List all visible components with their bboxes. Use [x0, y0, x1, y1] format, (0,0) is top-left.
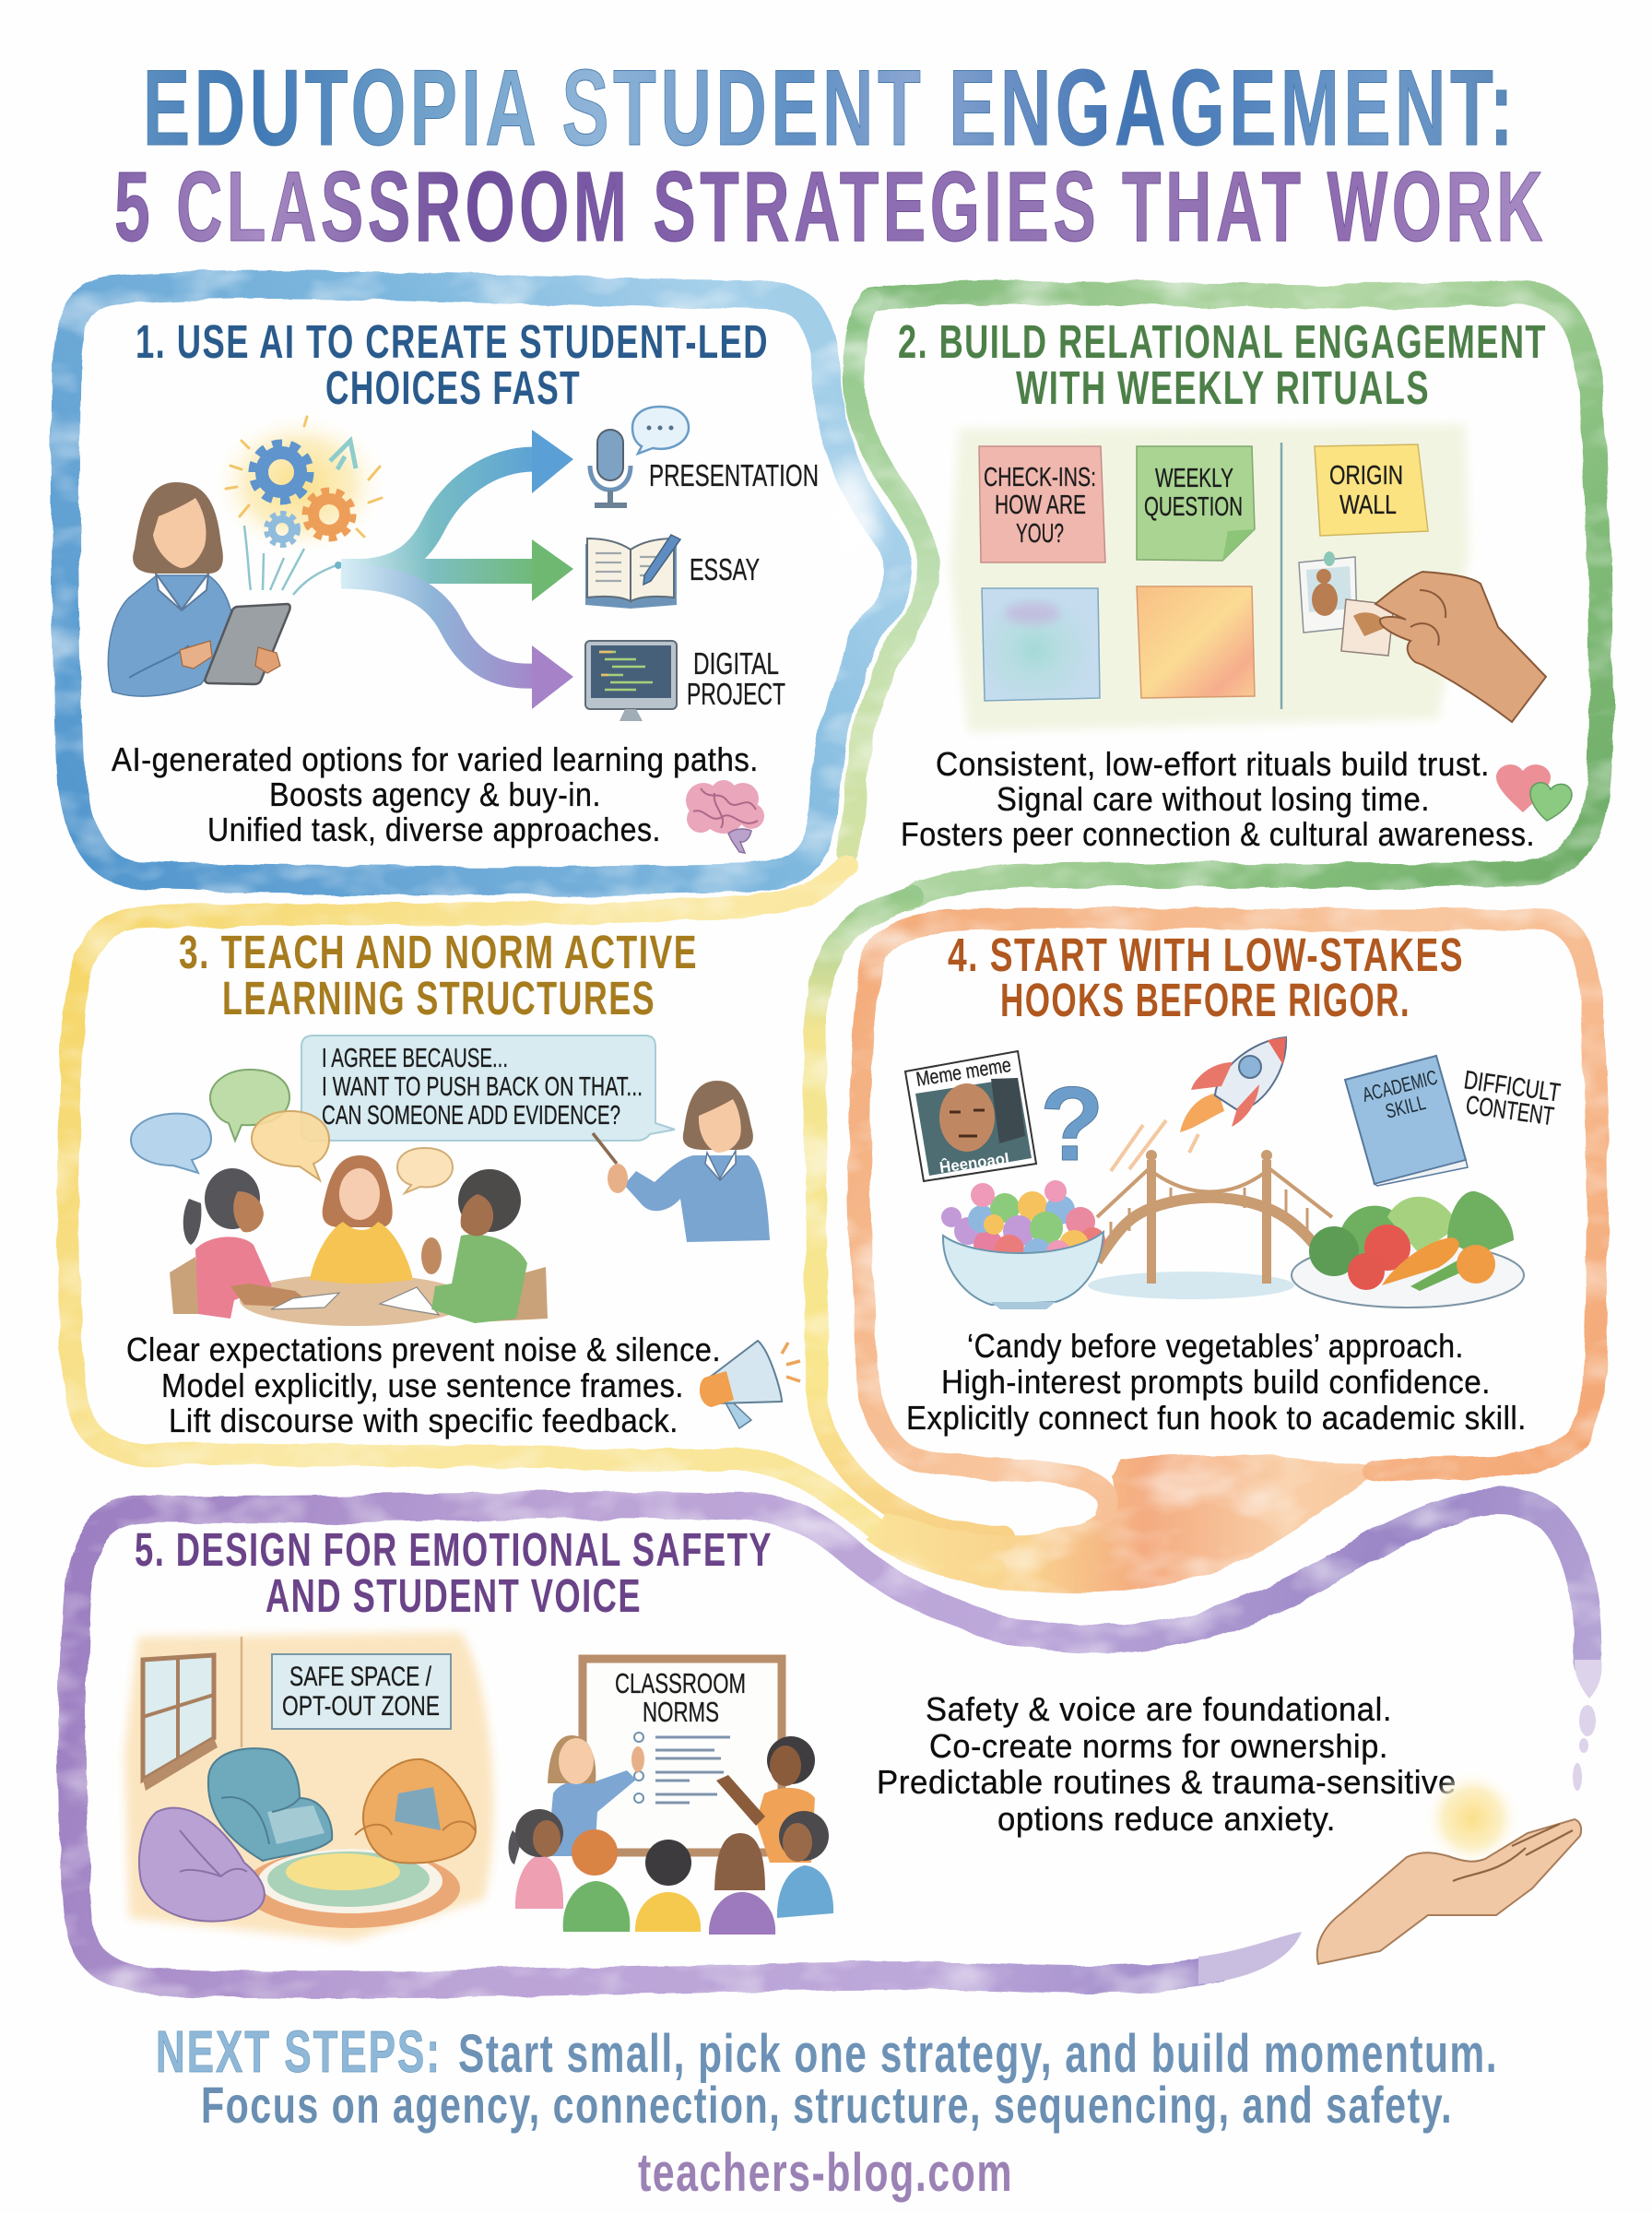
heading 3: 3. TEACH AND NORM ACTIVE — [179, 926, 698, 978]
sign: safe space: SAFE SPACE / — [289, 1662, 431, 1692]
illustration: students at table — [170, 1155, 548, 1326]
blue armchair — [208, 1748, 332, 1861]
note: weekly question: QUESTION — [1144, 492, 1243, 522]
arrow: to essay — [341, 539, 573, 601]
note: check-ins: CHECK-INS: — [984, 463, 1096, 492]
illustration: meme card — [905, 1051, 1036, 1181]
frame: purple — [72, 1502, 1587, 1984]
icon: monitor with code — [585, 641, 677, 721]
illustration: blue book: SKILL — [1383, 1091, 1428, 1123]
body text 5 — [877, 1690, 1457, 1838]
student presenter — [716, 1736, 815, 1863]
illustration: sticky note wall — [950, 424, 1546, 732]
heading 3: LEARNING STRUCTURES — [222, 972, 655, 1024]
heading 5: 5. DESIGN FOR EMOTIONAL SAFETY — [135, 1523, 773, 1576]
illustration: vegetable plate — [1292, 1191, 1524, 1308]
purple beanbag — [139, 1808, 265, 1922]
sweater — [108, 575, 233, 696]
tapered end of frame — [1198, 1932, 1302, 1984]
note: weekly question: WEEKLY — [1155, 464, 1233, 493]
icon: hand placing photo — [1375, 572, 1546, 722]
icon: open book and pen — [585, 535, 680, 609]
arrow: to digital project — [341, 576, 573, 709]
heading 4 — [948, 929, 1464, 1026]
illustration: speech bubbles: I WANT TO PUSH BACK ON THAT... — [322, 1072, 643, 1102]
body text 4 — [906, 1327, 1527, 1437]
body text 5: Predictable routines & trauma-sensitive — [877, 1763, 1457, 1801]
note: origin wall — [1315, 444, 1428, 536]
body text 4: ‘Candy before vegetables’ approach. — [967, 1327, 1464, 1365]
frame: green — [848, 292, 1601, 899]
icon: megaphone — [700, 1341, 800, 1428]
label: difficult content — [1462, 1065, 1562, 1130]
note: origin wall: ORIGIN — [1329, 461, 1403, 491]
illustration: blue book — [1345, 1056, 1468, 1186]
purple drips — [1573, 1660, 1601, 1791]
panel 4: low-stakes hooks — [859, 918, 1598, 1512]
body text 2 — [901, 745, 1535, 853]
window — [143, 1655, 218, 1791]
label: digital project — [687, 646, 785, 711]
heading 4: 4. START WITH LOW-STAKES — [948, 929, 1464, 981]
tablet — [205, 604, 290, 684]
illustration: bridge — [1088, 1150, 1332, 1299]
heading 1 — [136, 315, 769, 414]
illustration: blue book: ACADEMIC — [1360, 1065, 1440, 1106]
label: digital project: PROJECT — [687, 677, 785, 711]
body text 3: Model explicitly, use sentence frames. — [161, 1367, 684, 1404]
illustration: candy bowl — [941, 1180, 1105, 1309]
label: presentation: PRESENTATION — [649, 458, 819, 492]
body text 5: Safety & voice are foundational. — [926, 1690, 1392, 1728]
paper — [271, 1293, 339, 1309]
frame: orange — [859, 918, 1598, 1512]
heading 2: WITH WEEKLY RITUALS — [1016, 361, 1430, 414]
chairs — [170, 1257, 201, 1314]
body text 2: Fosters peer connection & cultural awareness. — [901, 815, 1535, 853]
hair and face — [133, 482, 223, 574]
table — [240, 1274, 470, 1326]
illustration: meme card: Meme meme — [914, 1053, 1013, 1091]
note: blue watercolor — [982, 588, 1100, 701]
icon: question mark: ? — [1040, 1066, 1104, 1183]
seated students — [509, 1809, 833, 1935]
note: orange watercolor — [1137, 586, 1255, 698]
board: NORMS — [643, 1696, 719, 1728]
watercolor connecting blob — [867, 1454, 1387, 1593]
frame: blue — [65, 285, 898, 881]
hands — [180, 641, 212, 669]
heading 3 — [179, 926, 698, 1024]
note: check-ins — [979, 446, 1105, 562]
illustration: speech bubbles: I AGREE BECAUSE... — [322, 1044, 508, 1073]
icon: open hand with glow — [1317, 1770, 1581, 1964]
illustration: speech bubbles — [131, 1035, 675, 1193]
illustration: teacher pointing — [593, 1081, 770, 1242]
note: origin wall: WALL — [1339, 491, 1397, 520]
student: left — [195, 1237, 272, 1319]
rug — [242, 1849, 460, 1928]
body text 2: Signal care without losing time. — [997, 780, 1430, 818]
next steps text: NEXT STEPS: — [156, 2018, 442, 2085]
sign: safe space — [272, 1654, 451, 1729]
heading 5: AND STUDENT VOICE — [266, 1569, 642, 1622]
orange chair — [355, 1759, 476, 1864]
label: essay: ESSAY — [690, 552, 760, 586]
icon: microphone and speech bubble — [590, 407, 689, 505]
note: check-ins: YOU? — [1016, 519, 1064, 549]
body text 3: Clear expectations prevent noise & silence. — [126, 1331, 721, 1368]
heading 1: CHOICES FAST — [325, 361, 581, 414]
note: weekly question — [1137, 446, 1255, 561]
icon: hearts — [1496, 764, 1572, 821]
heading 1: 1. USE AI TO CREATE STUDENT-LED — [136, 315, 769, 368]
panel 3: active learning — [68, 867, 1005, 1569]
body text 4: High-interest prompts build confidence. — [941, 1363, 1491, 1401]
illustration: speech bubbles: CAN SOMEONE ADD EVIDENCE? — [322, 1101, 620, 1130]
frame: yellow — [68, 867, 1005, 1569]
label: difficult content: DIFFICULT — [1462, 1065, 1562, 1107]
website: teachers-blog.com — [638, 2143, 1013, 2203]
icon: brain — [686, 780, 764, 853]
divider — [1280, 443, 1282, 709]
label: digital project: DIGITAL — [693, 646, 779, 680]
illustration: safe space corner — [124, 1632, 493, 1941]
panel 1: AI choices — [65, 285, 898, 881]
next steps text — [156, 2018, 1498, 2134]
student: right — [431, 1235, 527, 1323]
heading 4: HOOKS BEFORE RIGOR. — [1000, 974, 1410, 1026]
body text 3: Lift discourse with specific feedback. — [169, 1402, 678, 1439]
label: difficult content: CONTENT — [1464, 1090, 1556, 1130]
board — [583, 1659, 782, 1852]
icon: rocket — [1111, 1037, 1286, 1171]
student: middle — [323, 1155, 393, 1227]
board: CLASSROOM — [615, 1667, 746, 1699]
body text 2: Consistent, low-effort rituals build trust. — [936, 745, 1490, 783]
note: check-ins: HOW ARE — [995, 491, 1086, 520]
title — [114, 47, 1547, 262]
heading 2 — [898, 315, 1547, 414]
body text 1: AI-generated options for varied learning paths. — [112, 740, 759, 778]
illustration: classroom norms — [509, 1659, 833, 1935]
body text 1 — [112, 740, 759, 848]
sign: safe space: OPT-OUT ZONE — [282, 1691, 440, 1722]
body text 1: Boosts agency & buy-in. — [269, 775, 601, 813]
heading 5 — [135, 1523, 773, 1622]
photo cards — [1299, 551, 1394, 656]
body text 5: options reduce anxiety. — [997, 1800, 1336, 1838]
body text 1: Unified task, diverse approaches. — [207, 811, 661, 848]
body text 5: Co-create norms for ownership. — [929, 1727, 1388, 1765]
body text 3 — [126, 1331, 721, 1439]
icon: gears — [254, 441, 356, 544]
icon: teacher with tablet and gears — [108, 412, 387, 696]
illustration: meme card: ĤeenoaoI — [938, 1150, 1010, 1177]
arrow: to presentation — [341, 430, 573, 572]
teacher at board — [548, 1735, 644, 1856]
panel 5: emotional safety — [72, 1502, 1601, 1984]
body text 4: Explicitly connect fun hook to academic skill. — [906, 1399, 1527, 1437]
